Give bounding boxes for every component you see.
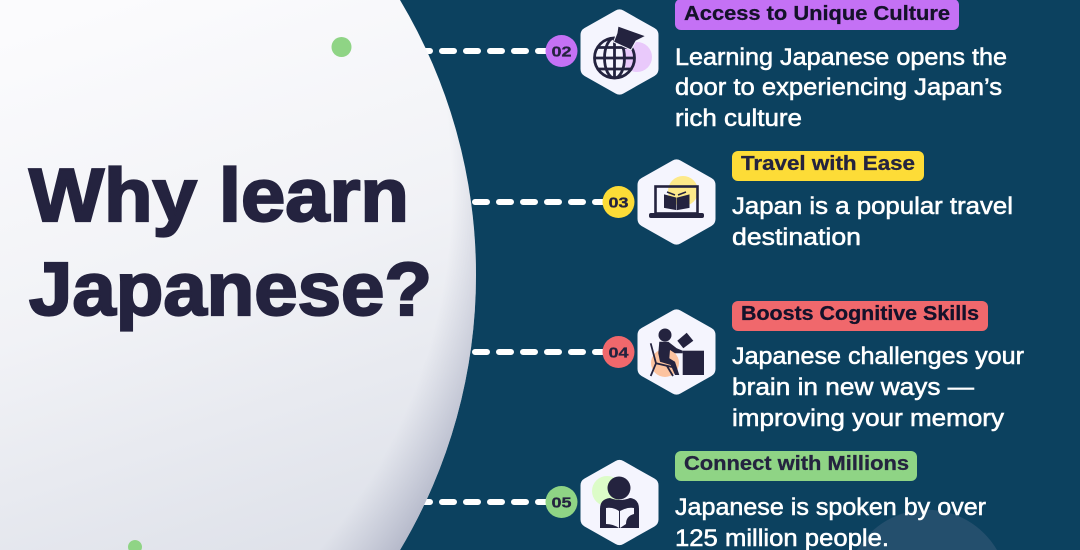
hexagon icon: person at desk <box>646 318 708 386</box>
description: Learning Japanese opens the <box>675 44 1007 71</box>
hexagon icon: person reading <box>588 468 650 537</box>
connector 05 <box>418 499 548 505</box>
description <box>732 193 1013 251</box>
pill heading <box>675 451 917 481</box>
number badge 03 <box>602 186 634 218</box>
pill heading: Access to Unique Culture <box>684 3 950 25</box>
number badge 05 <box>546 486 578 518</box>
pill heading: Connect with Millions <box>684 453 909 475</box>
number badge 05: 05 <box>552 494 572 512</box>
pill heading <box>675 0 959 30</box>
title <box>29 153 432 331</box>
description: door to experiencing Japan’s <box>675 74 1002 101</box>
title: Why learn <box>29 153 409 237</box>
title: Japanese? <box>29 247 432 331</box>
connector 02 <box>418 48 548 54</box>
item 05: Connect with Millions <box>546 451 986 550</box>
pill heading: Travel with Ease <box>741 153 915 175</box>
pill heading: Boosts Cognitive Skills <box>741 303 979 325</box>
description: brain in new ways — <box>732 374 974 401</box>
description: Japanese challenges your <box>732 343 1024 370</box>
description: Japan is a popular travel <box>732 193 1013 220</box>
green dot top <box>332 37 352 57</box>
white sphere panel <box>0 0 476 550</box>
number badge 04: 04 <box>608 344 629 362</box>
number badge 02 <box>546 35 578 67</box>
number badge 04 <box>602 336 634 368</box>
description <box>732 343 1024 432</box>
description <box>675 44 1007 132</box>
decorative lighter circle, bottom right <box>857 510 997 550</box>
pill heading <box>732 301 988 331</box>
connector 03 <box>475 199 605 205</box>
item 04: Boosts Cognitive Skills <box>602 301 1024 432</box>
number badge 02: 02 <box>552 44 572 60</box>
description <box>675 494 986 550</box>
number badge 03: 03 <box>608 194 628 212</box>
description: rich culture <box>675 105 802 132</box>
hexagon icon: laptop with book <box>646 168 708 236</box>
description: improving your memory <box>732 405 1004 432</box>
green dot bottom <box>128 540 142 550</box>
description: Japanese is spoken by over <box>675 494 986 521</box>
connector 04 <box>475 349 605 355</box>
pill heading <box>732 151 924 181</box>
item 02: Access to Unique Culture <box>546 0 1007 132</box>
description: destination <box>732 224 861 251</box>
item 03: Travel with Ease <box>602 151 1013 251</box>
hexagon icon: globe with graduation cap <box>588 18 652 86</box>
